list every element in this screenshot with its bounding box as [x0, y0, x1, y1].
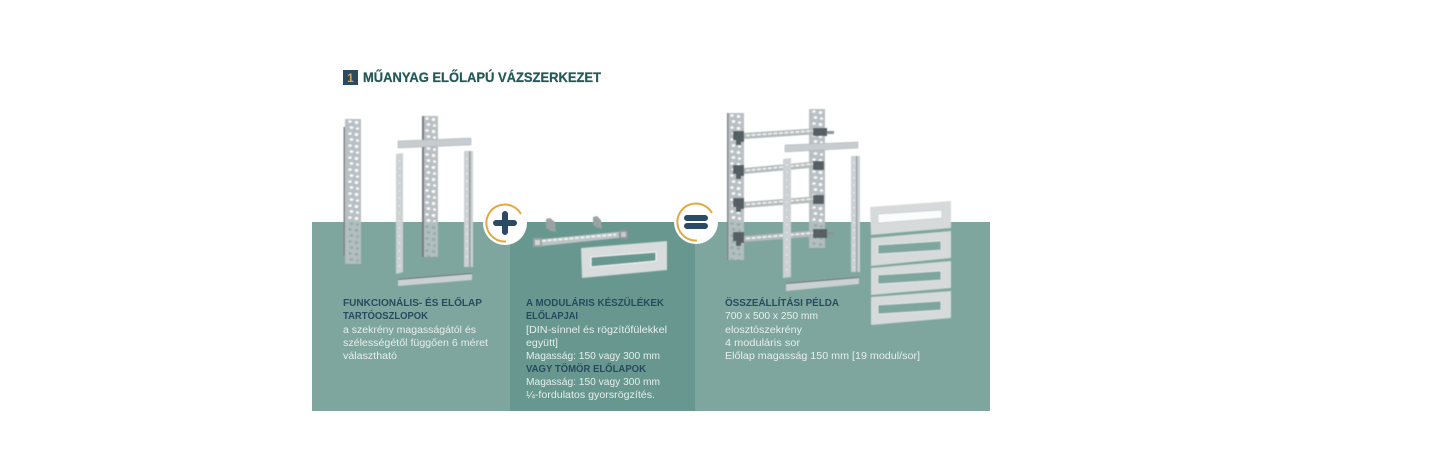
front panel 2	[871, 231, 951, 266]
DIN rail	[533, 230, 628, 247]
illustration: DIN rail, fixing lugs and front panel	[533, 216, 667, 278]
front panel 1	[870, 201, 951, 235]
DIN rails and clips	[733, 128, 834, 246]
text block: support columns: a szekrény magasságától és	[343, 325, 476, 336]
text block: modular front panels: együtt]	[526, 338, 558, 349]
text block: support columns: választható	[343, 351, 397, 362]
fixing lugs	[546, 216, 602, 232]
left perforated column	[344, 119, 361, 264]
text block: assembly example	[725, 296, 920, 362]
narrow post right	[851, 156, 860, 272]
text block: assembly example: ÖSSZEÁLLÍTÁSI PÉLDA	[725, 296, 839, 309]
icon: plus in circle	[483, 201, 527, 245]
text block: support columns: szélességétől függően 6 méret	[343, 338, 488, 349]
text block: modular front panels: ¼-fordulatos gyorsrögzítés.	[526, 389, 655, 401]
text block: assembly example: 700 x 500 x 250 mm	[725, 311, 818, 322]
icon: equals in circle	[674, 200, 718, 244]
title icon: number 1	[343, 70, 358, 85]
text block: modular front panels: VAGY TÖMÖR ELŐLAPOK	[526, 362, 647, 375]
text block: assembly example: 4 moduláris sor	[725, 338, 801, 349]
text block: support columns: FUNKCIONÁLIS- ÉS ELŐLAP	[343, 296, 482, 309]
text block: modular front panels: Magasság: 150 vagy 300 mm	[526, 351, 660, 362]
text block: assembly example: Előlap magasság 150 mm [19 modul/sor]	[725, 351, 920, 362]
front panel	[581, 241, 667, 278]
text block: modular front panels: [DIN-sínnel és rögzítőfülekkel	[526, 325, 667, 336]
right column	[809, 109, 825, 248]
right narrow post	[464, 151, 473, 267]
panel: middle darker column	[510, 222, 695, 411]
text block: assembly example: elosztószekrény	[725, 325, 802, 336]
title icon: number 1: 1	[347, 71, 354, 85]
front panel 4	[871, 291, 951, 325]
left column	[727, 113, 744, 260]
text block: modular front panels: A MODULÁRIS KÉSZÜLÉKEK	[526, 296, 665, 309]
bottom bar	[398, 273, 472, 286]
left narrow post	[396, 153, 403, 274]
panel: teal background	[312, 222, 990, 411]
illustration: assembled frame example	[727, 109, 951, 325]
text block: support columns	[343, 296, 488, 362]
top bar	[785, 142, 858, 152]
title: MŰANYAG ELŐLAPÚ VÁZSZERKEZET	[363, 68, 601, 85]
narrow post left	[783, 158, 791, 278]
text block: modular front panels	[526, 296, 667, 401]
text block: modular front panels: ELŐLAPJAI	[526, 309, 578, 322]
text block: modular front panels: Magasság: 150 vagy 300 mm	[526, 377, 660, 388]
text block: support columns: TARTÓOSZLOPOK	[343, 309, 429, 322]
top bar	[398, 138, 471, 148]
centre perforated column	[422, 116, 438, 257]
front panel 3	[871, 261, 951, 295]
illustration: support columns and front-panel posts	[344, 116, 473, 286]
bottom bar	[786, 277, 859, 291]
